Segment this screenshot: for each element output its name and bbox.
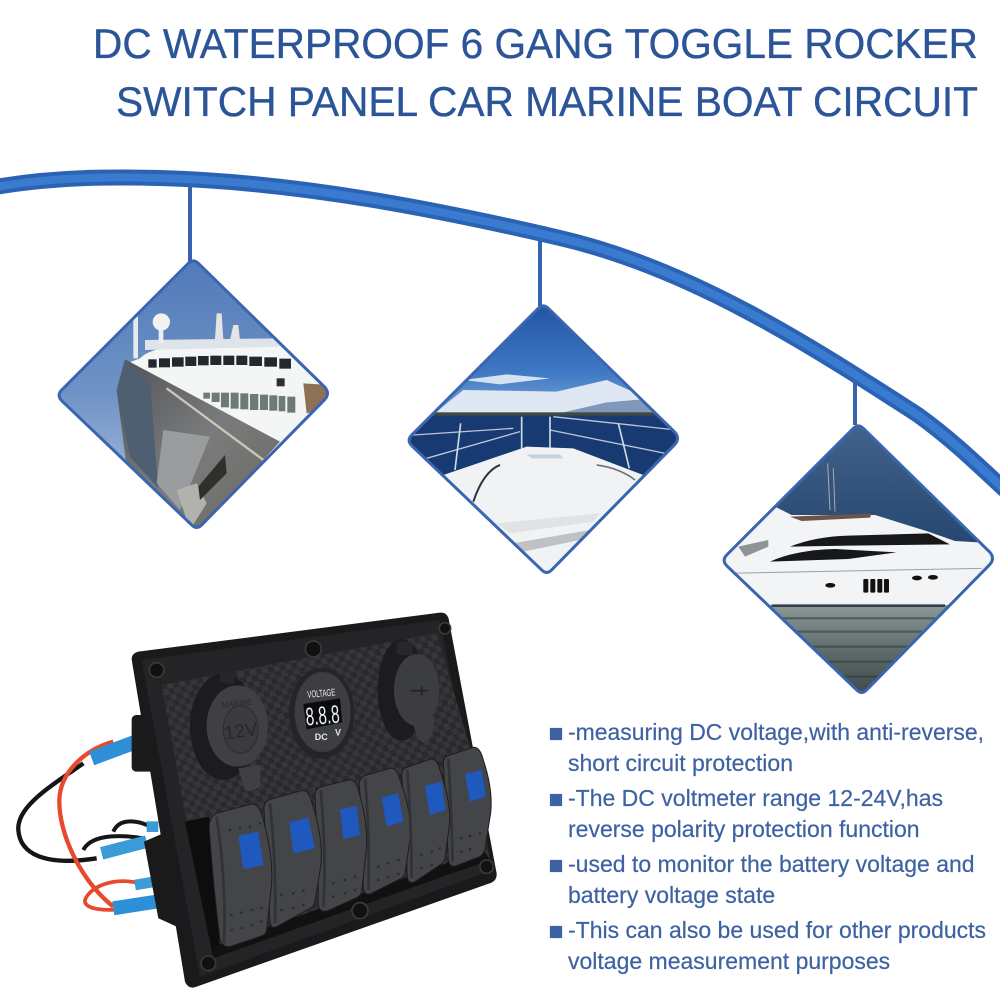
rocker switches [209, 747, 491, 947]
carbon fibre inset [162, 633, 490, 958]
photo diamond: cruise ship [58, 259, 329, 529]
rocker 3 [315, 780, 367, 911]
12V socket [190, 669, 268, 791]
photo diamond: white yacht [722, 424, 994, 694]
photo diamond: boat bow at sea [400, 295, 687, 578]
rocker 1 [209, 804, 272, 947]
bullet 2: reverse polarity protection function [568, 816, 920, 842]
connector line 1 [188, 184, 192, 262]
connector line 3 [853, 380, 857, 425]
bullet 4: -This can also be used for other products [568, 917, 986, 943]
USB socket [378, 639, 439, 743]
bullet 4 [550, 917, 986, 974]
clouds [436, 380, 640, 412]
title: DC WATERPROOF 6 GANG TOGGLE ROCKER [93, 20, 978, 67]
voltmeter: VOLTAGE [307, 687, 336, 701]
title: SWITCH PANEL CAR MARINE BOAT CIRCUIT [116, 78, 978, 125]
bullet 1 [550, 719, 984, 776]
rocker contour shading [217, 758, 453, 943]
bullet 3: battery voltage state [568, 882, 775, 908]
deck [443, 447, 643, 578]
feature list [550, 719, 986, 974]
bullet 4: voltage measurement purposes [568, 948, 890, 974]
title [93, 20, 978, 125]
12V socket: MARINE [221, 697, 253, 710]
hull [117, 359, 280, 533]
blue arc cable [0, 177, 1000, 490]
rocker 5 [402, 759, 450, 883]
voltmeter: DC [315, 732, 328, 742]
ship superstructure [127, 345, 333, 463]
panel frame [132, 613, 497, 988]
yacht hull [715, 505, 995, 605]
screw holes [149, 623, 493, 971]
rocker 2 [264, 791, 321, 927]
bullet 1: short circuit protection [568, 750, 793, 776]
voltmeter: 8.8.8 [304, 701, 341, 731]
wires and terminals [18, 742, 158, 910]
rocker 4 [359, 768, 410, 894]
voltmeter: V [335, 728, 341, 738]
bullet 2: -The DC voltmeter range 12-24V,has [568, 785, 943, 811]
bullet 3: -used to monitor the battery voltage and [568, 851, 975, 877]
product photo: switch panel [18, 613, 497, 988]
sea [410, 416, 676, 475]
bullet 1: -measuring DC voltage,with anti-reverse, [568, 719, 984, 745]
rocker 6 [443, 747, 491, 866]
rocker blue lights [238, 770, 486, 869]
connector line 2 [538, 238, 542, 306]
12V socket: 12V [223, 718, 259, 744]
voltmeter [289, 668, 354, 759]
bullet 2 [550, 785, 943, 842]
bullet 3 [550, 851, 975, 908]
rocker dots [229, 822, 481, 931]
